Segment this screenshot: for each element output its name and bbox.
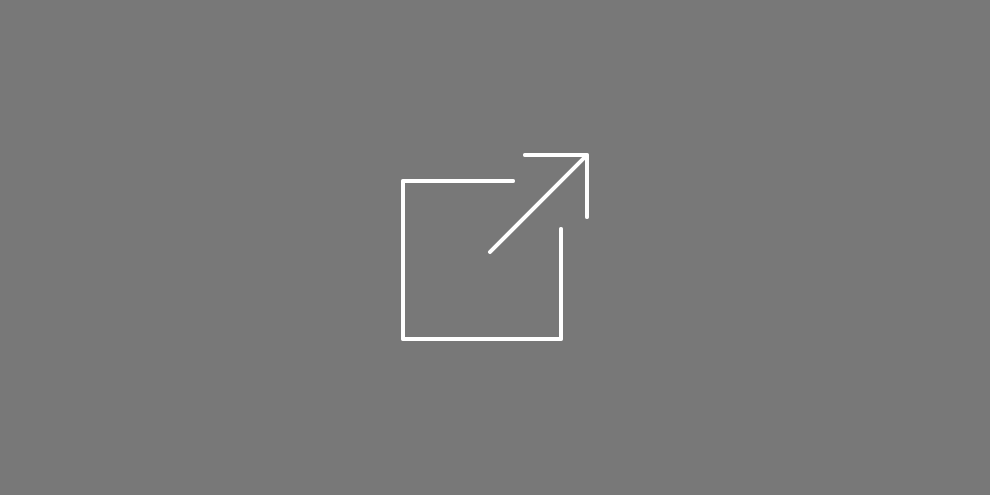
icon: external link <box>403 155 587 339</box>
arrow: diagonal <box>490 155 587 252</box>
icon: open box <box>403 181 561 339</box>
